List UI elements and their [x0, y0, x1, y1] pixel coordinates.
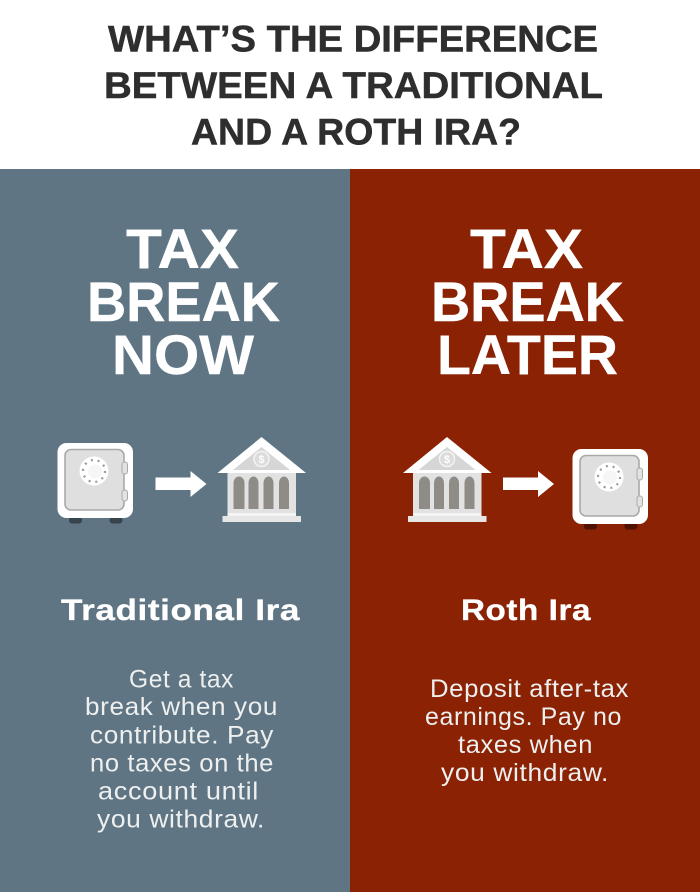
text: roth description: taxes when: [458, 731, 593, 759]
text: traditional description: no taxes on the: [90, 750, 274, 778]
heading: tax break later: LATER: [437, 323, 618, 386]
title: AND A ROTH IRA?: [191, 112, 521, 152]
text: roth description: you withdraw.: [441, 759, 609, 787]
icon: bank: [218, 437, 306, 522]
text: traditional description: account until: [98, 778, 259, 806]
subheading: traditional ira: Traditional Ira: [61, 594, 300, 627]
text: traditional description: break when you: [85, 693, 278, 721]
arrow: bank to safe: [503, 471, 554, 497]
heading: tax break now: BREAK: [87, 270, 280, 333]
text: traditional description: Get a tax: [129, 666, 234, 694]
heading: tax break later: TAX: [470, 217, 583, 280]
text: traditional description: contribute. Pay: [90, 722, 274, 750]
icon: bank: [403, 437, 492, 522]
text: traditional description: [85, 666, 278, 834]
heading: tax break later: [431, 217, 624, 386]
panel: traditional IRA: [0, 169, 350, 892]
text: roth description: [425, 675, 629, 787]
heading: tax break later: BREAK: [431, 270, 624, 333]
heading: tax break now: NOW: [112, 323, 254, 386]
panel: roth IRA: [350, 169, 700, 892]
title: BETWEEN A TRADITIONAL: [104, 65, 603, 106]
heading: tax break now: [87, 217, 280, 386]
icon: bank: $: [444, 454, 450, 466]
text: traditional description: you withdraw.: [97, 806, 265, 834]
subheading: roth ira: Roth Ira: [461, 594, 591, 627]
text: roth description: earnings. Pay no: [425, 703, 622, 731]
arrow: safe to bank: [156, 471, 206, 497]
text: roth description: Deposit after-tax: [430, 675, 629, 703]
icon: safe: [572, 449, 648, 530]
icon: safe: [58, 443, 133, 524]
heading: tax break now: TAX: [126, 217, 239, 280]
icon: bank: $: [258, 454, 265, 466]
title: WHAT’S THE DIFFERENCE: [108, 18, 598, 60]
title: [104, 18, 603, 152]
